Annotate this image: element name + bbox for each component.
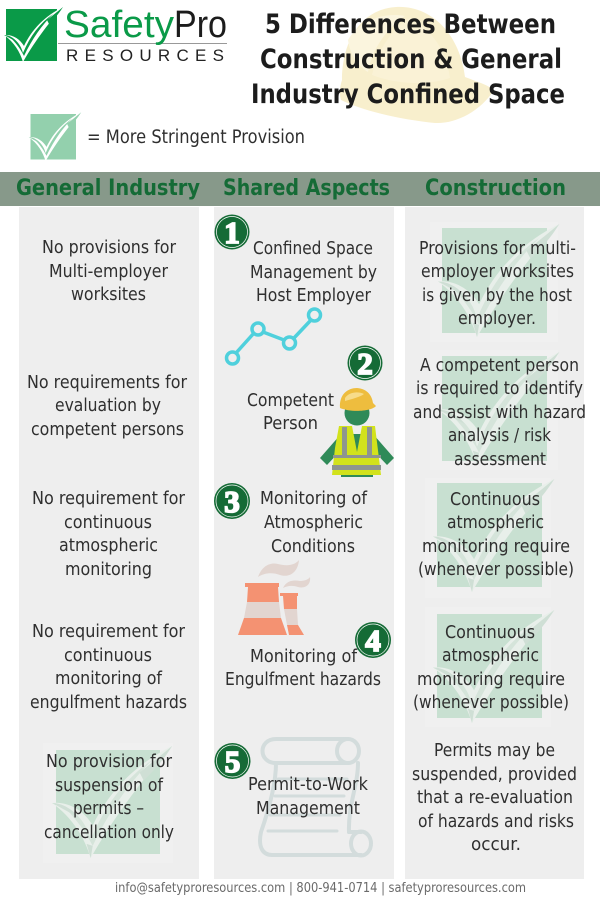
badge 1: 1 bbox=[224, 215, 240, 250]
logo: SafetyPro Resources: Safety bbox=[64, 4, 174, 46]
watermark check: engulfment monitoring bbox=[425, 607, 554, 727]
text: engulfment hazards: continuous bbox=[64, 646, 152, 666]
text: competent persons: competent persons bbox=[31, 420, 184, 440]
text: engulfment hazards: Monitoring of bbox=[250, 647, 358, 667]
badge 5 bbox=[214, 743, 250, 779]
text: permit-to-work bbox=[248, 775, 369, 819]
text: continuous engulfment monitoring bbox=[413, 623, 569, 713]
text: suspension of permits: suspension of bbox=[55, 776, 164, 796]
icon: cooling towers bbox=[238, 560, 310, 635]
text: permit suspension: Permits may be bbox=[434, 741, 555, 761]
icon: worker in hard hat and vest bbox=[320, 388, 394, 477]
header band: Shared Aspects bbox=[223, 175, 390, 201]
text: competent person required: A competent person bbox=[420, 356, 579, 376]
text: permit suspension bbox=[412, 741, 577, 855]
icon: pale hard hat behind title bbox=[340, 7, 494, 123]
text: engulfment hazards bbox=[225, 647, 381, 690]
badge 4: 4 bbox=[365, 623, 381, 658]
text: engulfment hazards: engulfment hazards bbox=[30, 693, 187, 713]
text: continuous engulfment monitoring: atmospheric bbox=[442, 646, 539, 666]
text: continuous atmospheric monitoring: (whenever possible) bbox=[418, 560, 574, 580]
text: atmospheric conditions: Conditions bbox=[271, 537, 355, 557]
icon: line chart bbox=[226, 309, 320, 364]
text: host employer provisions: is given by the host bbox=[422, 286, 572, 306]
text: suspension of permits: permits – bbox=[73, 799, 144, 819]
badge 2 bbox=[348, 346, 382, 381]
text: competent person: Competent bbox=[247, 391, 334, 411]
text: atmospheric conditions bbox=[260, 489, 368, 557]
text: continuous engulfment monitoring: (whenever possible) bbox=[413, 693, 569, 713]
title bbox=[251, 9, 565, 110]
text: engulfment hazards: No requirement for bbox=[32, 622, 186, 642]
badge 1 bbox=[214, 214, 250, 250]
text: host employer provisions bbox=[419, 239, 576, 329]
badge 3 bbox=[214, 483, 250, 519]
text: engulfment hazards: monitoring of bbox=[55, 669, 163, 689]
panel: general industry bbox=[19, 207, 199, 879]
text: engulfment hazards: Engulfment hazards bbox=[225, 670, 381, 690]
text: permit suspension: suspended, provided bbox=[412, 765, 577, 785]
watermark check: atmospheric monitoring bbox=[425, 478, 554, 598]
text: multi-employer: worksites bbox=[71, 285, 146, 305]
watermark check: suspension bbox=[43, 743, 173, 863]
text: host employer provisions: Provisions for multi- bbox=[419, 239, 576, 259]
text: continuous engulfment monitoring: monitoring require bbox=[417, 670, 565, 690]
text: competent persons: evaluation by bbox=[55, 396, 161, 416]
badge 4 bbox=[355, 622, 391, 658]
text: continuous atmospheric monitoring: Continuous bbox=[450, 490, 540, 510]
text: engulfment hazards bbox=[30, 622, 187, 713]
text: suspension of permits bbox=[44, 752, 174, 843]
panel: shared aspects bbox=[214, 207, 394, 879]
watermark check: competent person bbox=[430, 350, 559, 470]
text: atmospheric monitoring: No requirement for bbox=[32, 489, 186, 509]
text: competent persons bbox=[27, 373, 188, 440]
badge 3: 3 bbox=[224, 484, 240, 519]
legend: more stringent provision: = More Stringent Provision bbox=[87, 127, 305, 148]
title: Construction & General bbox=[260, 44, 562, 75]
icon: permit scroll bbox=[260, 739, 371, 856]
footer contact line: info@safetyproresources.com | 800-941-0714 | safetyproresources.com bbox=[115, 880, 526, 896]
logo: SafetyPro Resources bbox=[4, 4, 227, 65]
text: continuous atmospheric monitoring bbox=[418, 490, 574, 580]
text: multi-employer: Multi-employer bbox=[49, 262, 169, 282]
text: continuous atmospheric monitoring: atmospheric bbox=[447, 513, 544, 533]
badge 2: 2 bbox=[357, 346, 373, 381]
text: competent person required bbox=[413, 356, 586, 470]
text: atmospheric monitoring: monitoring bbox=[65, 560, 152, 580]
text: confined space management: Management by bbox=[250, 263, 377, 283]
text: confined space management bbox=[250, 239, 377, 306]
text: competent person required: assessment bbox=[454, 450, 546, 470]
text: multi-employer: No provisions for bbox=[42, 238, 177, 258]
header band: General Industry bbox=[16, 175, 200, 201]
header band: Construction bbox=[425, 175, 566, 201]
text: suspension of permits: No provision for bbox=[46, 752, 173, 772]
text: atmospheric monitoring: continuous bbox=[64, 513, 152, 533]
text: suspension of permits: cancellation only bbox=[44, 823, 174, 843]
text: host employer provisions: employer worksites bbox=[421, 262, 574, 282]
text: permit suspension: that a re-evaluation bbox=[417, 788, 573, 808]
text: continuous engulfment monitoring: Continuous bbox=[445, 623, 535, 643]
panel: construction bbox=[405, 207, 586, 879]
text: permit suspension: of hazards and risks bbox=[418, 812, 574, 832]
text: atmospheric monitoring bbox=[32, 489, 186, 580]
text: competent person: Person bbox=[263, 414, 318, 434]
text: confined space management: Confined Space bbox=[253, 239, 373, 259]
text: atmospheric conditions: Monitoring of bbox=[260, 489, 368, 509]
text: atmospheric conditions: Atmospheric bbox=[264, 513, 363, 533]
text: permit suspension: occur. bbox=[471, 835, 521, 855]
logo: SafetyPro Resources: RESOURCES bbox=[66, 46, 224, 65]
text: atmospheric monitoring: atmospheric bbox=[59, 536, 158, 556]
legend: more stringent provision bbox=[29, 112, 305, 161]
text: confined space management: Host Employer bbox=[256, 286, 372, 306]
text: permit-to-work: Management bbox=[256, 799, 360, 819]
text: competent person bbox=[247, 391, 334, 434]
header band bbox=[0, 172, 600, 206]
watermark check: multi-employer bbox=[430, 222, 559, 342]
text: permit-to-work: Permit-to-Work bbox=[248, 775, 369, 795]
text: competent person required: analysis / risk bbox=[448, 426, 552, 446]
text: competent persons: No requirements for bbox=[27, 373, 188, 393]
text: competent person required: is required to identify bbox=[416, 379, 583, 399]
title: 5 Differences Between bbox=[265, 9, 556, 40]
text: host employer provisions: employer. bbox=[458, 309, 536, 329]
text: multi-employer bbox=[42, 238, 177, 305]
text: continuous atmospheric monitoring: monitoring require bbox=[422, 537, 570, 557]
badge 5: 5 bbox=[225, 744, 240, 779]
logo: SafetyPro Resources: Pro bbox=[174, 4, 227, 46]
